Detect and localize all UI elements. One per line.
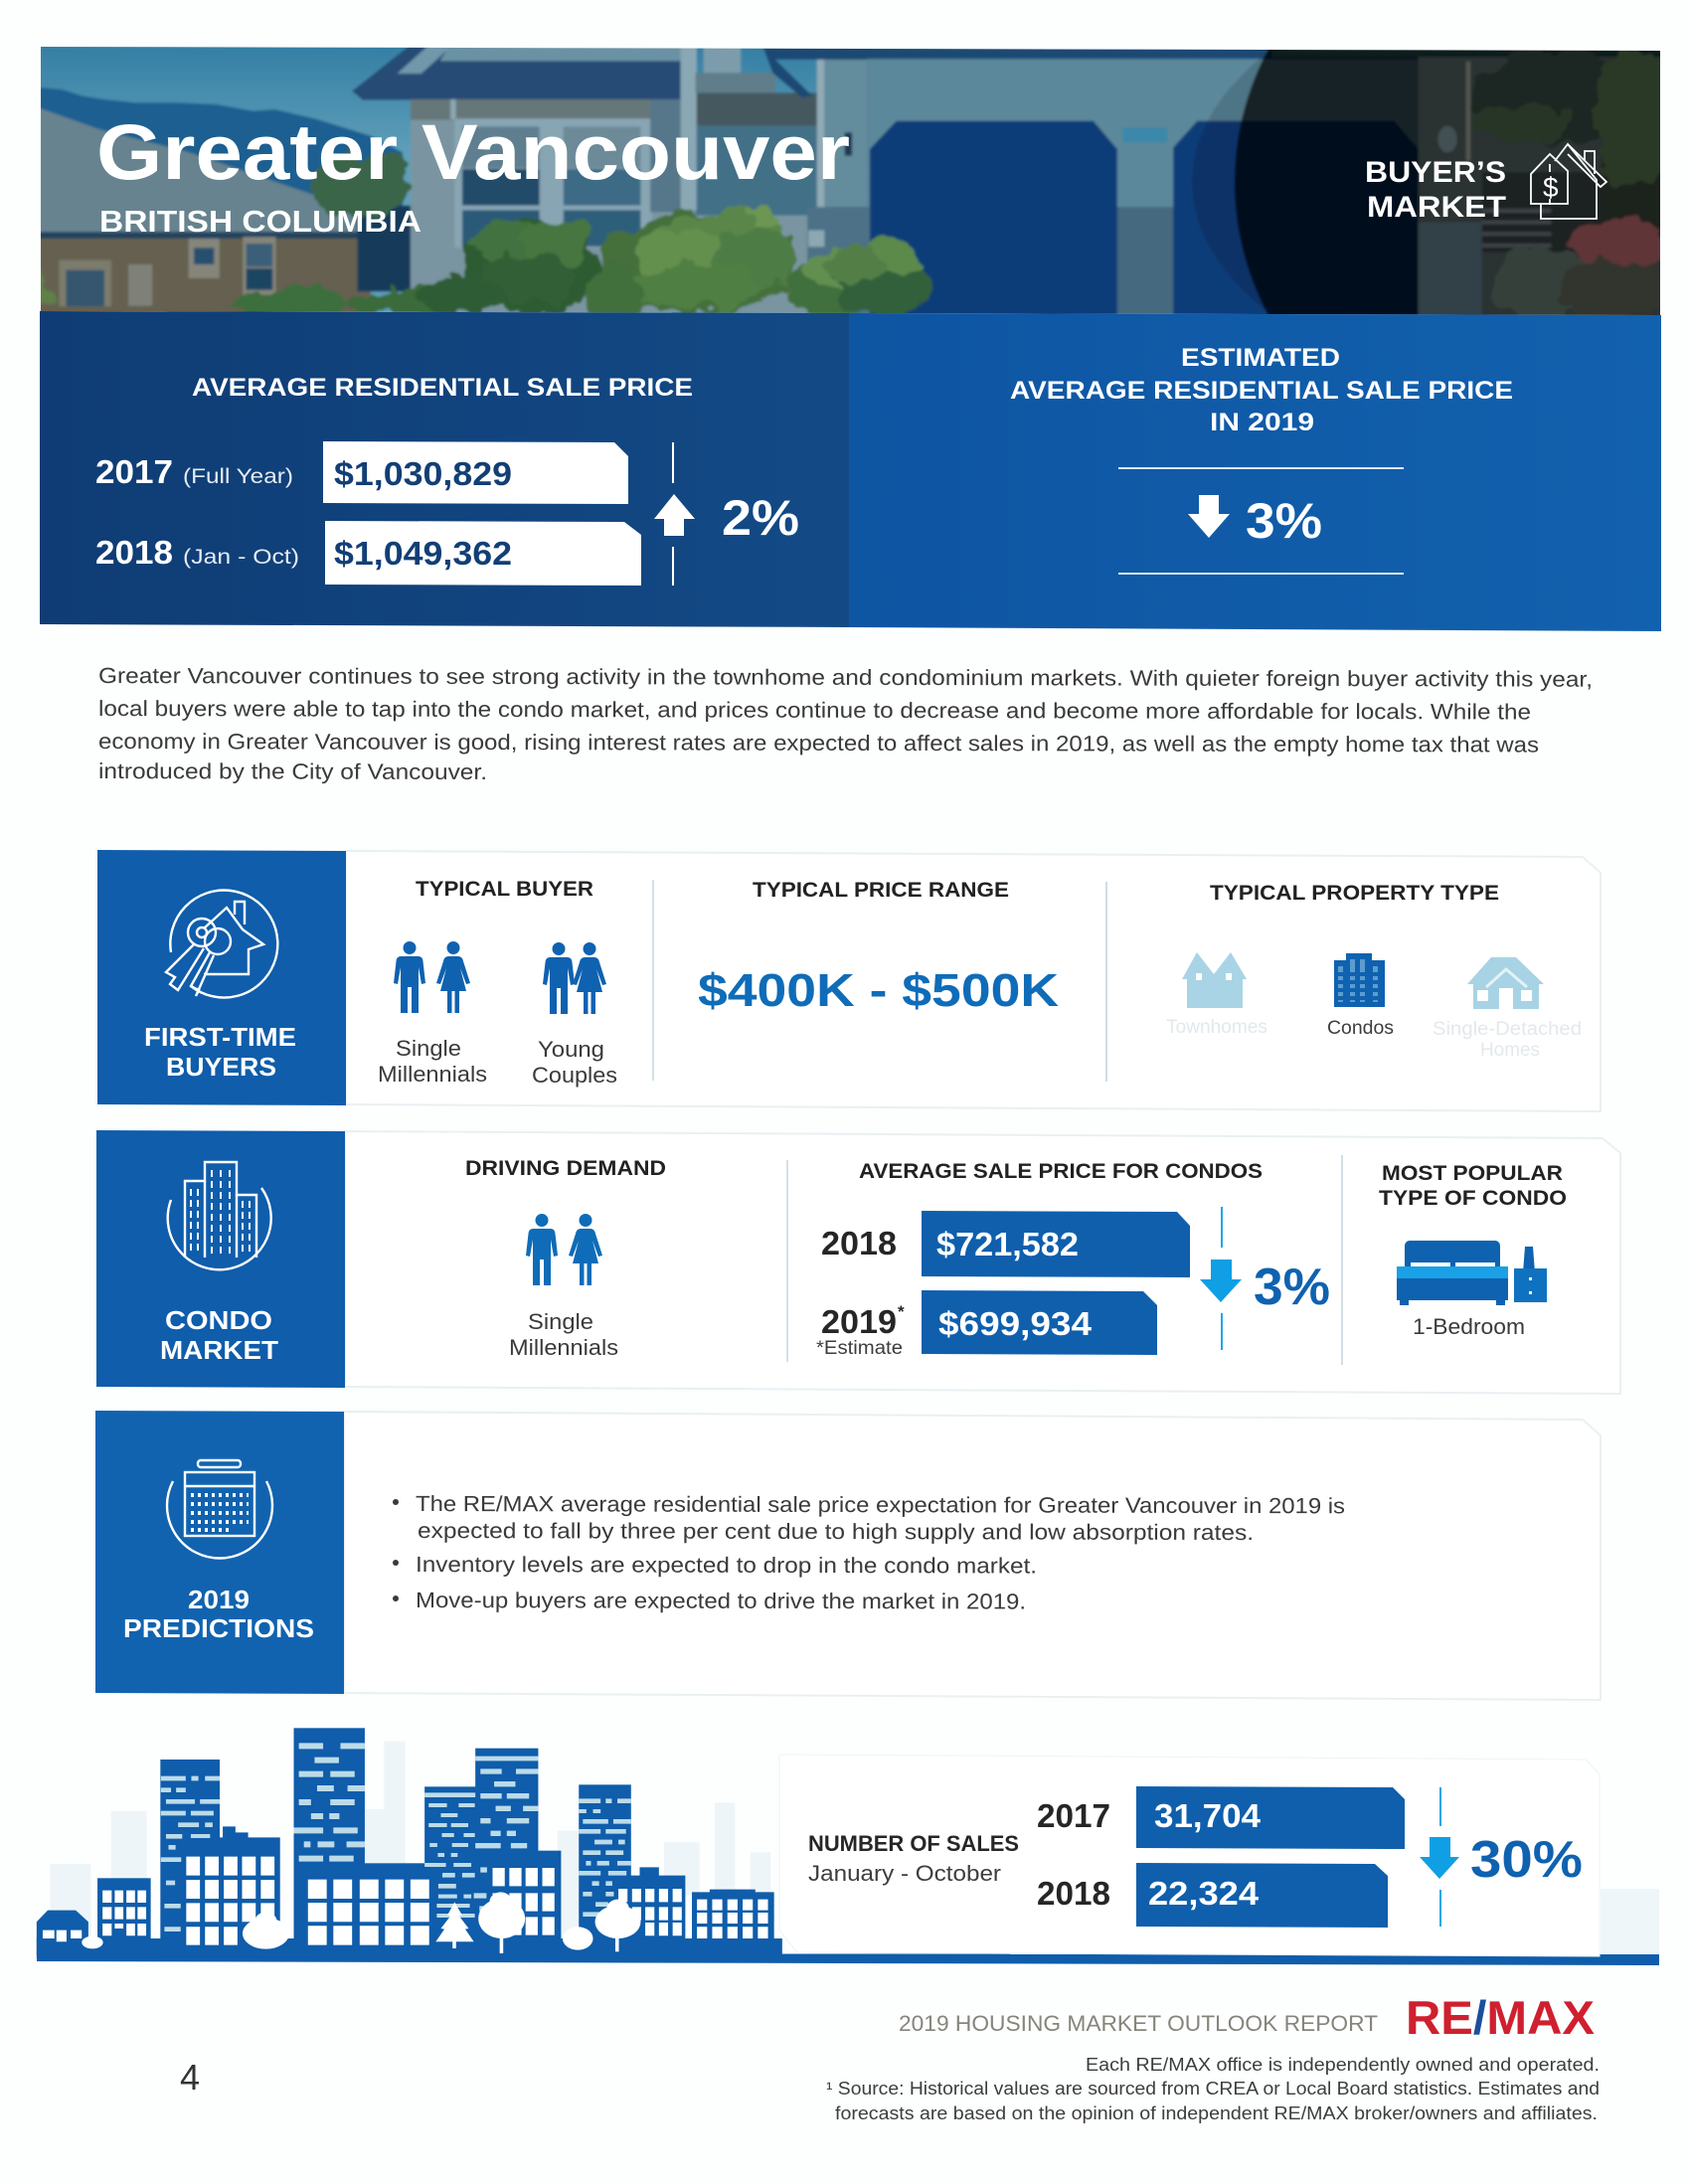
intro paragraph: local buyers were able to tap into the condo market, and prices continue to decrease and become more affordable for locals. While the	[98, 696, 1531, 725]
subtitle: BRITISH COLUMBIA	[99, 204, 422, 239]
section: typical buyer: TYPICAL BUYER	[416, 878, 593, 901]
bar: 2018 sales: 22,324	[1148, 1875, 1260, 1912]
row: 2017	[95, 441, 628, 504]
icon: keys and house in circle	[166, 891, 277, 998]
change: down 3%: 3%	[1246, 493, 1322, 549]
footer: disclaimer: forecasts are based on the opinion of independent RE/MAX broker/owners and affiliates.	[835, 2103, 1598, 2123]
section: average sale price for condos	[816, 1160, 1330, 1359]
bar: 2018 price: $721,582	[936, 1226, 1079, 1262]
heading: estimated average residential sale price in 2019: AVERAGE RESIDENTIAL SALE PRICE	[1010, 377, 1513, 405]
label	[123, 1585, 314, 1643]
section: typical buyer: Young	[538, 1037, 604, 1062]
section: typical price range	[698, 879, 1059, 1016]
icon: bed and nightstand	[1397, 1241, 1547, 1305]
icon: calendar in circle	[167, 1460, 272, 1558]
change: down 3%	[1188, 493, 1322, 549]
bullet list: Move-up buyers are expected to drive the market in 2019.	[416, 1588, 1026, 1614]
section: typical price range: $400K - $500K	[698, 964, 1059, 1016]
label: number of sales	[808, 1831, 1019, 1886]
intro paragraph: Greater Vancouver continues to see strong activity in the townhome and condominium markets. With quieter foreign buyer activity this year,	[98, 663, 1593, 692]
label: BUYERS	[166, 1052, 276, 1082]
row: 2018: (Jan - Oct)	[183, 546, 299, 569]
label: FIRST-TIME	[144, 1022, 296, 1052]
intro paragraph	[98, 663, 1593, 784]
section: typical property type: TYPICAL PROPERTY TYPE	[1210, 882, 1499, 905]
label: PREDICTIONS	[123, 1613, 314, 1643]
section: typical property type	[1166, 882, 1582, 1061]
section: most popular type of condo: MOST POPULAR	[1382, 1162, 1563, 1185]
section: typical buyer	[378, 878, 617, 1088]
section: driving demand: DRIVING DEMAND	[465, 1157, 666, 1180]
bullet list: Inventory levels are expected to drop in the condo market.	[416, 1552, 1037, 1579]
change: down 3%: 3%	[1254, 1259, 1330, 1316]
bar: 2017 sales: 31,704	[1154, 1797, 1262, 1834]
section: most popular type of condo: TYPE OF CONDO	[1379, 1187, 1567, 1210]
section: typical property type: Homes	[1480, 1040, 1540, 1061]
row: 2018: $1,049,362	[334, 535, 512, 572]
icon: single millennials	[394, 941, 470, 1013]
label	[160, 1305, 278, 1365]
tile: first-time buyers	[97, 850, 346, 1105]
panel: number of sales	[779, 1755, 1600, 1956]
label: number of sales: NUMBER OF SALES	[808, 1831, 1019, 1856]
label: CONDO	[165, 1305, 272, 1335]
icon: condos	[1334, 953, 1385, 1007]
footer: report title: 2019 HOUSING MARKET OUTLOOK REPORT	[899, 2011, 1378, 2036]
section: most popular type of condo	[1379, 1162, 1567, 1339]
tile: condo market	[96, 1130, 345, 1388]
row: 2018	[95, 521, 641, 586]
section: average sale price for condos: *Estimate	[816, 1338, 903, 1359]
bar: 2019 price: $699,934	[938, 1305, 1093, 1342]
intro paragraph: introduced by the City of Vancouver.	[98, 758, 487, 784]
hero title	[96, 107, 850, 239]
heading: estimated average residential sale price in 2019	[1010, 344, 1513, 436]
icon: house with price tag	[1531, 144, 1606, 219]
label	[144, 1022, 296, 1082]
bar: 2018 sales	[1037, 1863, 1388, 1928]
footer: disclaimer	[826, 2055, 1600, 2123]
page number: 4	[180, 2057, 200, 2098]
section: typical buyer: Couples	[532, 1063, 617, 1088]
section: typical buyer: Millennials	[378, 1062, 487, 1087]
bar: 2018 price	[922, 1211, 1190, 1277]
bar: 2017 sales	[1037, 1786, 1405, 1849]
change: up 2%	[654, 442, 799, 586]
bullet list	[393, 1491, 1345, 1614]
panel: average residential sale price	[40, 311, 849, 627]
change: down 30%: 30%	[1470, 1831, 1583, 1889]
row: 2017: (Full Year)	[183, 465, 293, 488]
label: MARKET	[160, 1335, 278, 1365]
section: driving demand	[465, 1157, 666, 1360]
icon: house with price tag: $	[1543, 172, 1559, 203]
footer: disclaimer: ¹ Source: Historical values are sourced from CREA or Local Board statistics. Estimates and	[826, 2079, 1600, 2099]
panel: condo market	[96, 1130, 1620, 1394]
section: average sale price for condos: *	[898, 1302, 905, 1321]
row: 2018: 2018	[95, 534, 173, 571]
panel: 2019 predictions	[95, 1411, 1601, 1700]
icon: townhomes	[1182, 952, 1247, 1008]
panel: estimated price in 2019	[849, 313, 1661, 631]
section: most popular type of condo: 1-Bedroom	[1413, 1314, 1525, 1339]
icon: young couples	[543, 942, 606, 1014]
tile: 2019 predictions	[95, 1411, 344, 1694]
section: typical price range: TYPICAL PRICE RANGE	[753, 879, 1009, 902]
badge: buyer's market: BUYER’S	[1365, 156, 1506, 189]
panel: first-time buyers	[97, 850, 1601, 1111]
heading: estimated average residential sale price in 2019: ESTIMATED	[1181, 344, 1340, 372]
row: 2017: 2017	[95, 453, 173, 490]
change: down 30%	[1420, 1787, 1583, 1927]
footer: disclaimer: Each RE/MAX office is independently owned and operated.	[1086, 2055, 1600, 2075]
icon: single-detached homes	[1467, 957, 1544, 1009]
bar: 2017 sales: 2017	[1037, 1797, 1110, 1834]
section: typical property type: Condos	[1327, 1018, 1394, 1039]
section: average sale price for condos: 2019	[821, 1303, 897, 1340]
section: average sale price for condos: AVERAGE SALE PRICE FOR CONDOS	[859, 1160, 1263, 1183]
bullet list: The RE/MAX average residential sale price expectation for Greater Vancouver in 2019 is	[416, 1491, 1345, 1518]
icon: single millennials	[526, 1214, 602, 1285]
hero photo: house exterior	[41, 47, 1660, 315]
section: average sale price for condos: 2018	[821, 1225, 897, 1261]
label: number of sales: January - October	[808, 1861, 1001, 1886]
section: typical property type: Single-Detached	[1433, 1019, 1582, 1040]
city skyline illustration	[37, 1728, 1659, 1965]
change: up 2%: 2%	[722, 490, 799, 546]
change: down 3%	[1200, 1207, 1330, 1350]
bar: 2018 sales: 2018	[1037, 1875, 1110, 1912]
label: 2019	[188, 1585, 250, 1614]
heading: estimated average residential sale price in 2019: IN 2019	[1210, 409, 1314, 436]
bullet list: expected to fall by three per cent due to high supply and low absorption rates.	[418, 1518, 1254, 1545]
hero title: Greater Vancouver	[96, 107, 850, 196]
row: 2017: $1,030,829	[334, 455, 512, 492]
icon: condo towers in circle	[168, 1162, 271, 1269]
section: typical property type: Townhomes	[1166, 1017, 1267, 1038]
logo: RE/MAX: RE/MAX	[1406, 1991, 1595, 2044]
badge: buyer's market: MARKET	[1367, 191, 1506, 224]
bar: 2019 price	[922, 1290, 1157, 1355]
section: typical buyer: Single	[396, 1036, 461, 1061]
section: driving demand: Single	[528, 1309, 593, 1334]
heading: average residential sale price: AVERAGE RESIDENTIAL SALE PRICE	[192, 374, 693, 402]
section: driving demand: Millennials	[509, 1335, 618, 1360]
badge: buyer's market	[1365, 144, 1606, 224]
intro paragraph: economy in Greater Vancouver is good, rising interest rates are expected to affect sales in 2019, as well as the empty home tax that was	[98, 729, 1539, 757]
